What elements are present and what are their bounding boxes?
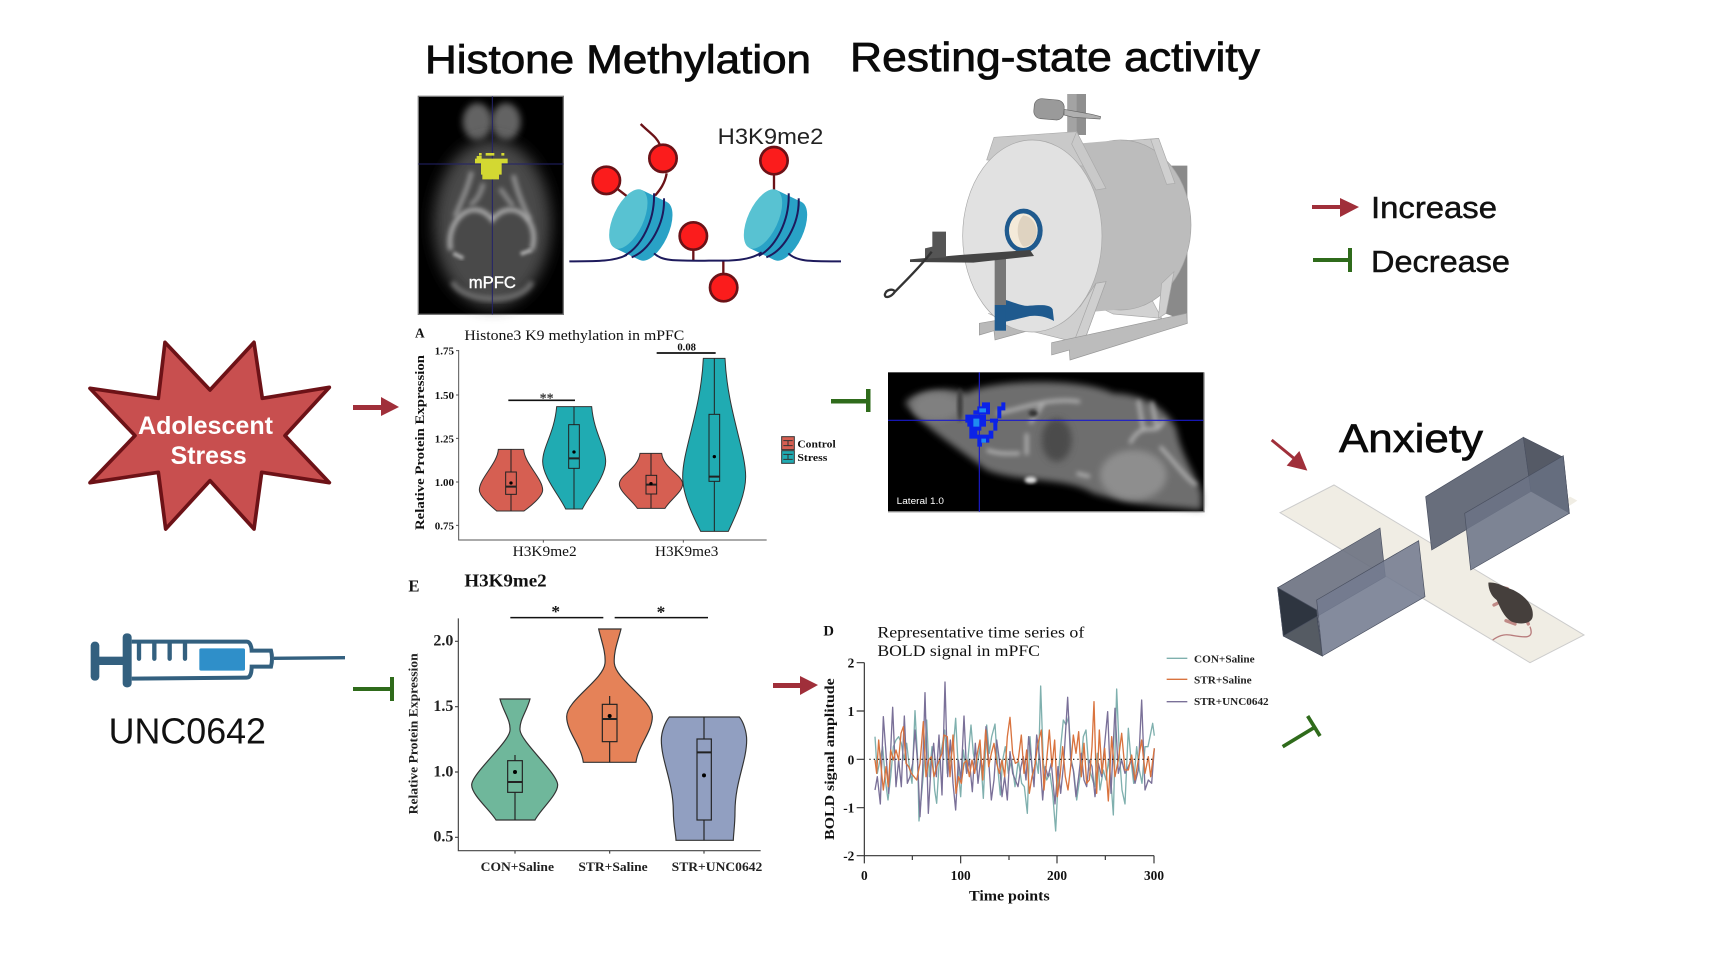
panel: violin chart Histone3 K9 methylation — [413, 325, 836, 560]
y tick labels — [433, 633, 453, 846]
closed arm: upper right — [1426, 437, 1569, 570]
stems of methyl groups — [617, 124, 774, 275]
arrow: into anxiety — [1272, 440, 1307, 471]
label: UNC0642: UNC0642 — [109, 710, 266, 751]
axes — [857, 663, 1154, 863]
zero reference line — [869, 758, 1154, 761]
series: STR+UNC0642 — [875, 682, 1154, 817]
y tick labels: 0.5 — [433, 829, 453, 846]
x tick labels: 200 — [1047, 868, 1067, 883]
y tick labels — [435, 346, 454, 532]
icon: syringe — [91, 633, 345, 687]
label: H3K9me2: H3K9me2 — [718, 124, 823, 149]
label: Adolescent Stress: Adolescent — [138, 413, 273, 440]
axes — [455, 618, 761, 854]
chart legend: STR+Saline — [1194, 674, 1252, 686]
scanner bore — [1005, 209, 1043, 253]
panel: nucleosome H3K9me2 diagram — [569, 124, 841, 301]
panel: mPFC brain scan, top view — [418, 96, 563, 314]
chart label A: A — [415, 325, 425, 340]
y tick labels — [843, 656, 855, 864]
icon: nucleosome left — [601, 184, 680, 266]
maze open arm — [1280, 485, 1584, 663]
icon: nucleosome right — [736, 184, 815, 266]
violins — [479, 358, 746, 531]
chart title — [877, 624, 1085, 660]
x tick labels: STR+Saline — [578, 860, 648, 874]
label: Adolescent Stress: Stress — [171, 443, 247, 470]
y tick labels: 1 — [848, 704, 854, 719]
y tick labels: 0.75 — [435, 520, 454, 532]
y tick labels: -2 — [843, 849, 855, 864]
chart legend: Control — [797, 438, 836, 450]
icon: increase arrow — [1312, 198, 1359, 217]
DNA strand — [569, 252, 841, 261]
y tick labels: 0 — [848, 752, 855, 767]
icon: decrease bar — [1313, 248, 1352, 272]
label: Lateral 1.0: Lateral 1.0 — [897, 496, 944, 506]
significance bars: ** — [540, 391, 554, 406]
chart legend: Stress — [797, 452, 827, 464]
panel: sagittal brain scan — [888, 372, 1204, 512]
methyl groups — [593, 145, 788, 301]
y tick labels: 1.75 — [435, 346, 454, 358]
arrow: stress increases methylation — [353, 397, 399, 416]
icon: mouse — [1488, 583, 1533, 640]
y tick labels: 1.5 — [433, 698, 453, 715]
x tick labels: 100 — [951, 868, 971, 883]
label: Adolescent Stress — [138, 413, 273, 470]
x tick labels: H3K9me3 — [655, 544, 718, 560]
arrow: methylation decreases resting-state activity — [831, 389, 870, 412]
x tick labels — [481, 860, 762, 874]
y tick labels: 1.00 — [435, 477, 454, 489]
legend label: Increase: Increase — [1371, 190, 1497, 225]
panel: elevated plus maze with mouse — [1272, 437, 1584, 747]
title: Anxiety: Anxiety — [1339, 417, 1483, 461]
x tick labels: 0 — [861, 868, 868, 883]
axes — [456, 350, 767, 543]
y tick labels: 2 — [848, 656, 855, 671]
animal bed and stand — [885, 232, 1054, 331]
title: Histone Methylation: Histone Methylation — [425, 38, 811, 82]
chart legend — [782, 437, 836, 464]
series: CON+Saline — [875, 686, 1154, 831]
x axis title: Time points — [969, 889, 1050, 905]
panel: syringe UNC0642 — [91, 633, 345, 751]
significance bars: * — [657, 603, 665, 622]
significance bars: 0.08 — [677, 343, 696, 354]
y axis title: BOLD signal amplitude — [823, 678, 838, 840]
legend: increase and decrease — [1312, 190, 1510, 279]
box plots — [508, 696, 711, 840]
panel: MRI scanner illustration — [885, 94, 1191, 360]
x tick labels: CON+Saline — [481, 860, 554, 874]
closed arm: lower left — [1278, 528, 1425, 656]
region highlight: mPFC voxels — [475, 153, 508, 179]
y tick labels: 1.50 — [435, 390, 454, 402]
activation voxels — [965, 402, 1005, 447]
panel: violin chart H3K9me2 with UNC0642 — [406, 571, 762, 874]
panel: adolescent stress burst — [90, 342, 329, 529]
x tick labels: H3K9me2 — [513, 544, 577, 560]
chart label D: D — [823, 624, 834, 640]
chart label E: E — [408, 577, 419, 596]
significance bars — [508, 343, 716, 406]
y tick labels: 1.25 — [435, 433, 454, 445]
significance bars: * — [551, 602, 560, 621]
x tick labels — [861, 868, 1164, 883]
violins — [472, 629, 747, 840]
x tick labels: 300 — [1144, 868, 1164, 883]
significance bars — [510, 602, 708, 622]
y tick labels: 2.0 — [433, 633, 453, 650]
chart title: Representative time series of — [877, 624, 1085, 641]
arrow: reduces anxiety — [1283, 716, 1320, 747]
chart legend: CON+Saline — [1194, 653, 1255, 665]
y axis title: Relative Protein Expression — [413, 355, 427, 530]
panel: BOLD time-series line chart — [823, 624, 1269, 905]
chart legend: STR+UNC0642 — [1194, 696, 1269, 708]
y tick labels: 1.0 — [433, 763, 453, 780]
legend label: Decrease: Decrease — [1371, 244, 1510, 279]
label: mPFC: mPFC — [469, 273, 516, 292]
mean points — [509, 450, 716, 485]
chart title: Histone3 K9 methylation in mPFC — [464, 328, 684, 344]
chart legend — [1167, 653, 1269, 708]
arrow: UNC0642 decreases methylation — [353, 677, 394, 701]
y axis title: Relative Protein Expression — [406, 653, 420, 814]
mean points — [513, 714, 706, 777]
arrow: methylation to BOLD signal — [773, 676, 818, 695]
x tick labels — [513, 544, 718, 560]
x tick labels: STR+UNC0642 — [672, 860, 762, 874]
title: Resting-state activity: Resting-state activity — [850, 34, 1261, 80]
series: STR+Saline — [875, 702, 1154, 801]
box plots — [506, 358, 720, 531]
y tick labels: -1 — [843, 801, 854, 816]
chart title: H3K9me2 — [464, 571, 547, 591]
chart title: BOLD signal in mPFC — [877, 643, 1040, 660]
